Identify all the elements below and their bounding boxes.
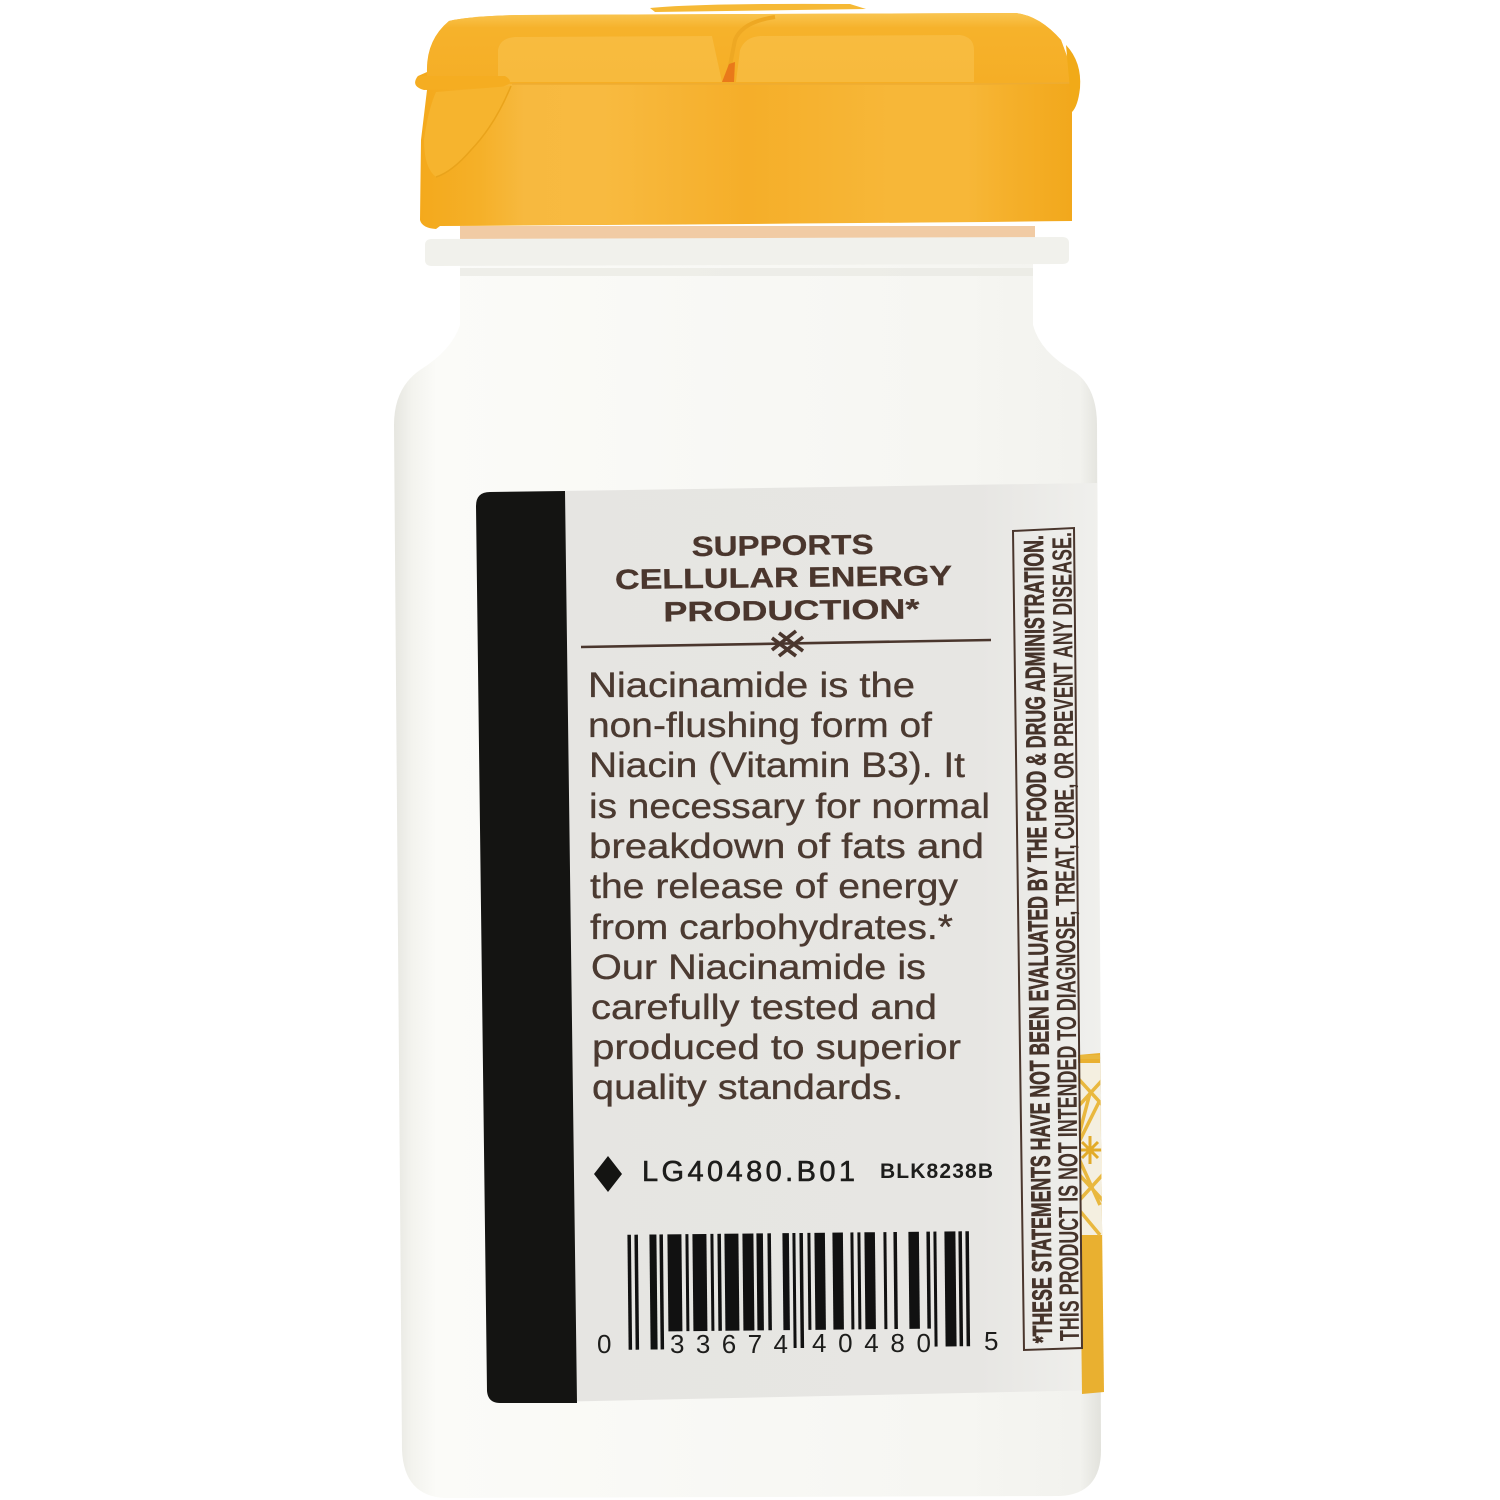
FDA disclaimer box bbox=[1013, 528, 1085, 1350]
product description: Our Niacinamide is bbox=[591, 947, 926, 987]
headline: SUPPORTS bbox=[691, 529, 874, 562]
barcode digits: 40480 bbox=[812, 1328, 931, 1358]
cap lid upper band bbox=[427, 13, 1072, 84]
cap top tab bbox=[650, 4, 866, 12]
product description: quality standards. bbox=[592, 1067, 903, 1107]
yellow wrap-around strip bbox=[1078, 1053, 1104, 1394]
disclaimer text: *THESE STATEMENTS HAVE NOT BEEN EVALUATED BY THE FOOD & DRUG ADMINISTRATION. bbox=[1018, 535, 1058, 1343]
front label wrap bbox=[476, 483, 1107, 1403]
cap lid highlight bbox=[498, 35, 974, 82]
barcode digits: 0 bbox=[597, 1329, 611, 1359]
yellow flip cap bbox=[415, 4, 1080, 229]
neck ring bbox=[425, 226, 1069, 266]
barcode digits bbox=[597, 1326, 998, 1359]
disclaimer text: THIS PRODUCT IS NOT INTENDED TO DIAGNOSE, TREAT, CURE, OR PREVENT ANY DISEASE. bbox=[1046, 532, 1085, 1341]
lot code: BLK8238B bbox=[880, 1160, 993, 1183]
headline: PRODUCTION* bbox=[663, 593, 920, 628]
product description: is necessary for normal bbox=[589, 786, 990, 826]
label paper bbox=[490, 483, 1103, 1403]
lot code bbox=[642, 1156, 993, 1188]
product description: non-flushing form of bbox=[588, 705, 932, 745]
headline bbox=[614, 528, 953, 628]
cap seam bbox=[512, 83, 1070, 84]
icon: diamond bbox=[594, 1156, 622, 1192]
black band bbox=[476, 491, 577, 1403]
lot code: LG40480.B01 bbox=[642, 1156, 855, 1188]
cap slit bbox=[722, 62, 735, 82]
product description: produced to superior bbox=[592, 1027, 961, 1067]
divider with star ornament bbox=[581, 631, 991, 656]
cap hinge bbox=[1066, 45, 1080, 112]
barcode bbox=[597, 1231, 998, 1359]
product description: from carbohydrates.* bbox=[590, 907, 953, 947]
product description: carefully tested and bbox=[591, 987, 937, 1027]
disclaimer text bbox=[1018, 532, 1085, 1343]
product description: Niacinamide is the bbox=[588, 665, 915, 705]
barcode digits: 5 bbox=[984, 1326, 998, 1356]
disclaimer border bbox=[1013, 528, 1082, 1350]
product description: breakdown of fats and bbox=[589, 826, 984, 866]
barcode digits: 33674 bbox=[670, 1329, 788, 1359]
product description: the release of energy bbox=[590, 866, 958, 906]
headline: CELLULAR ENERGY bbox=[615, 560, 953, 595]
cap shell bbox=[416, 13, 1072, 229]
cap thumb tab bbox=[415, 76, 510, 90]
bottle body bbox=[394, 262, 1101, 1498]
cap thumb recess bbox=[424, 86, 511, 177]
product description: Niacin (Vitamin B3). It bbox=[589, 745, 965, 785]
product description bbox=[588, 665, 990, 1107]
cap groove bbox=[727, 17, 775, 82]
